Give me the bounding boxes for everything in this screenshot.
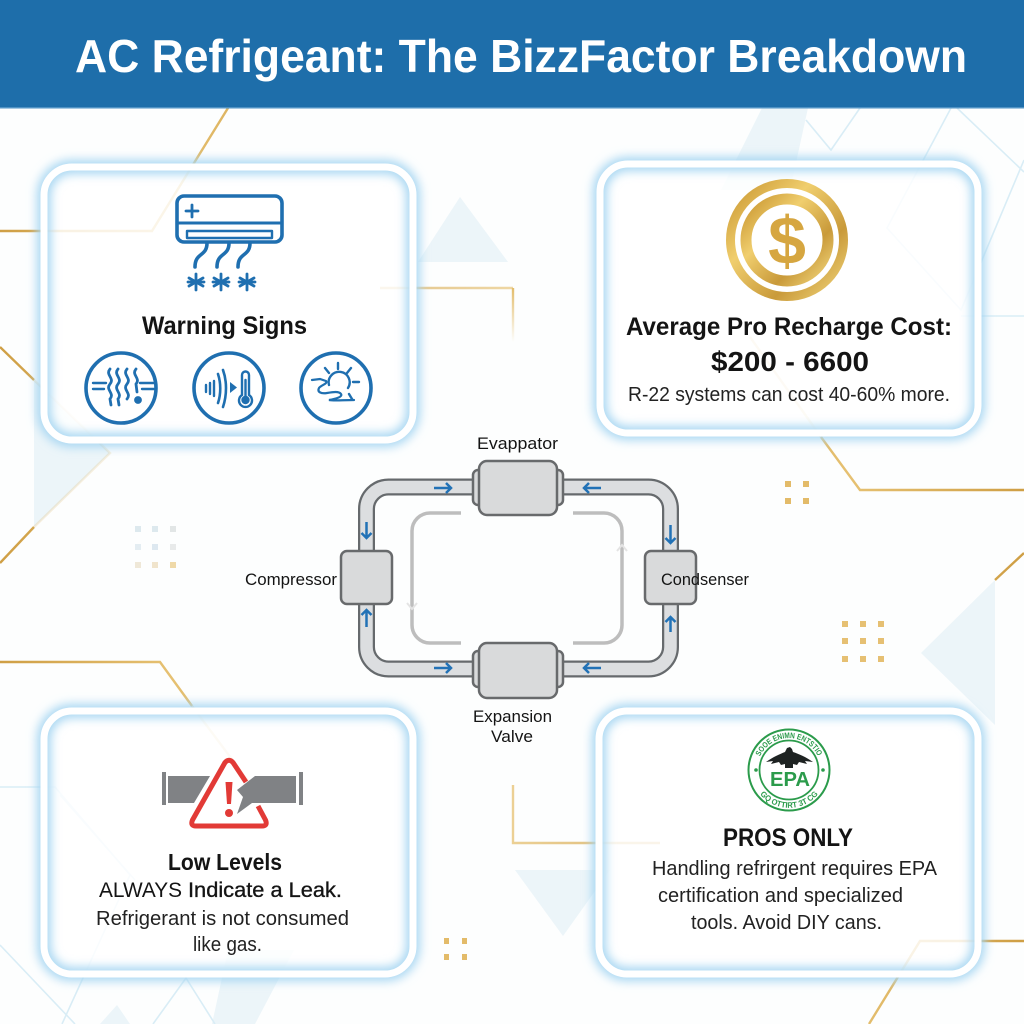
icon: EPA seal: EPA (770, 769, 810, 791)
dot grid: faint left (135, 526, 176, 568)
diagram: refrigerant cycle (245, 434, 749, 746)
dot grid: gold bottom (444, 938, 467, 960)
header banner (0, 0, 1024, 108)
panel: low levels leak (44, 711, 413, 974)
dot grid: gold upper right (785, 481, 809, 504)
body text: Refrigerant is not consumed (96, 908, 349, 930)
note: R-22 systems can cost 40-60% more. (628, 384, 950, 406)
body text (652, 858, 938, 934)
expansion valve unit (473, 643, 563, 698)
inner flow guide lines (407, 513, 627, 643)
subheading: Indicate a Leak. (188, 879, 342, 902)
body text: certification and specialized (658, 885, 903, 907)
heading: PROS ONLY (723, 824, 853, 852)
label: expansion valve: Expansion (473, 707, 552, 726)
panel: recharge cost (600, 164, 978, 433)
subheading (99, 879, 342, 902)
pipe loop (366, 487, 670, 669)
icon: gold dollar coin (730, 184, 844, 296)
label: evaporator: Evappator (477, 434, 558, 453)
body text: like gas. (193, 934, 262, 956)
compressor unit (341, 551, 392, 604)
body text: tools. Avoid DIY cans. (691, 912, 882, 934)
label: expansion valve: Valve (491, 727, 533, 746)
panel: pros only (585, 698, 993, 988)
icon: EPA seal (748, 728, 830, 812)
condenser unit (645, 551, 696, 604)
icon: EPA seal: GQ OTTIRT 3T CG (761, 792, 818, 808)
body text (96, 908, 349, 956)
icon: sun and snake hose (301, 353, 371, 423)
icon: gold dollar coin: $ (768, 203, 806, 279)
label: expansion valve (473, 707, 552, 746)
dot grid: gold right (842, 621, 884, 662)
label: compressor: Compressor (245, 570, 337, 589)
price range: $200 - 6600 (711, 346, 869, 377)
icon: EPA seal: SOOE ENIMN ENTSTIO (756, 732, 822, 756)
body text: Handling refrirgent requires EPA (652, 858, 938, 880)
heading: cost: Average Pro Recharge Cost: (626, 313, 952, 341)
title: AC Refrigeant: The BizzFactor Breakdown (75, 30, 967, 82)
subheading: ALWAYS (99, 879, 182, 902)
panel: warning signs (44, 167, 413, 440)
evaporator unit (473, 461, 563, 515)
flow arrows (362, 483, 676, 673)
icon: broken pipe with warning triangle (162, 760, 303, 826)
icon: wavy frost lines (86, 353, 156, 423)
icon: air conditioner with snowflakes (177, 196, 282, 290)
heading: Low Levels (168, 849, 282, 875)
label: condenser: Condsenser (661, 570, 749, 589)
heading: Warning Signs (142, 312, 307, 340)
icon: noise and temperature (194, 353, 264, 423)
